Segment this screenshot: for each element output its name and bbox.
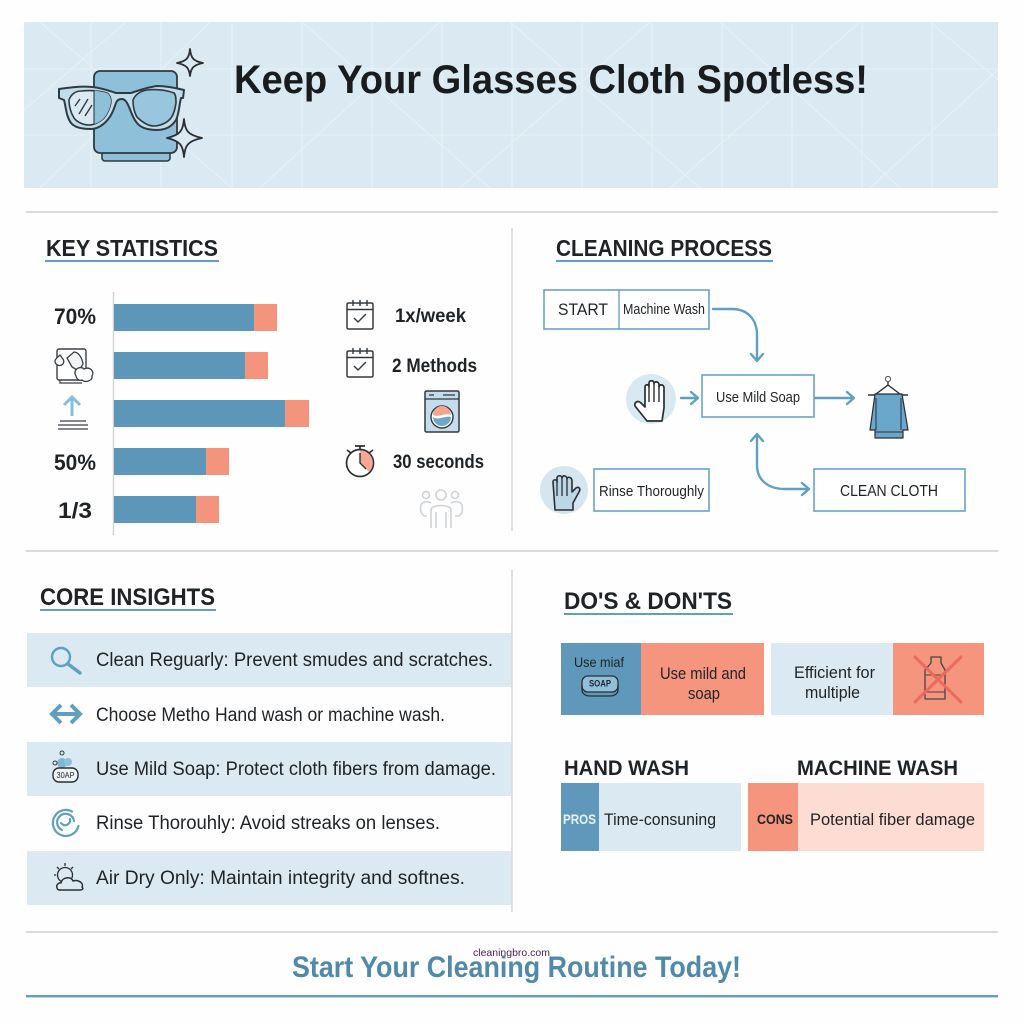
icon: small sparkle <box>177 49 203 76</box>
title: Keep Your Glasses Cloth Spotless! <box>234 58 868 102</box>
card: use mild soap do: Use miaf <box>574 654 624 670</box>
icon: glove in circle <box>540 466 588 514</box>
row: use mild soap: 30AP <box>56 771 74 780</box>
icon: calendar one <box>347 300 373 329</box>
row: rinse thoroughly: Rinse Thorouhly: Avoid streaks on lenses. <box>96 813 440 834</box>
label: machine wash: MACHINE WASH <box>797 757 958 780</box>
row: air dry only: Air Dry Only: Maintain integrity and softnes. <box>96 868 465 889</box>
row: clean regularly: Clean Reguarly: Prevent smudes and scratches. <box>96 650 493 671</box>
card: use mild soap do <box>561 643 764 715</box>
bar chart <box>114 304 309 523</box>
flow box: start and machine wash <box>544 290 709 329</box>
flow box: use mild soap <box>702 375 814 417</box>
footer call to action: Start Your Cleaning Routine Today! <box>292 951 741 984</box>
panel: key statistics <box>45 235 484 535</box>
stat: 70%: 70% <box>54 304 96 329</box>
card: efficient and no harsh chemicals <box>771 643 984 715</box>
stat: 1x/week: 1x/week <box>395 306 466 327</box>
icon: people <box>421 490 462 528</box>
card: use mild soap do: Use mild and <box>660 664 746 683</box>
flow box: use mild soap: Use Mild Soap <box>716 389 800 406</box>
icon: calendar two <box>347 348 373 377</box>
flow box: start and machine wash: Machine Wash <box>623 301 705 318</box>
icon: hand in circle <box>626 374 676 424</box>
arrow: soap and clean cloth <box>751 434 809 495</box>
card: cons <box>748 783 984 851</box>
icon: washing machine <box>425 391 459 432</box>
stat: 1/3: 1/3 <box>58 498 92 523</box>
icon: large sparkle <box>167 119 202 157</box>
heading: do's and don'ts: DO'S & DON'TS <box>564 588 732 615</box>
stat: 2 methods: 2 Methods <box>392 356 477 377</box>
card: efficient and no harsh chemicals: multiple <box>805 683 860 702</box>
row: use mild soap <box>27 742 511 796</box>
flow box: clean cloth <box>814 469 965 511</box>
card: use mild soap do: soap <box>688 684 720 703</box>
flow box: clean cloth: CLEAN CLOTH <box>840 483 938 500</box>
icon: stopwatch <box>346 446 374 476</box>
row: choose method: Choose Metho Hand wash or machine wash. <box>96 705 445 726</box>
panel: core insights <box>27 584 511 905</box>
stat: 30 seconds: 30 seconds <box>393 452 484 473</box>
card: pros <box>561 783 741 851</box>
icon: glasses and cloth <box>59 71 184 161</box>
row: air dry only <box>27 851 511 905</box>
arrow: hand to soap <box>681 392 698 404</box>
arrow: soap to drying <box>815 392 854 404</box>
card: pros: Time-consuning <box>604 810 716 829</box>
heading: core insights: CORE INSIGHTS <box>40 584 215 611</box>
arrow: machine wash to soap <box>713 309 763 361</box>
flow box: rinse thoroughly: Rinse Thoroughly <box>599 483 704 500</box>
flow box: rinse thoroughly <box>594 469 709 511</box>
row: clean regularly <box>27 633 511 687</box>
row: use mild soap: Use Mild Soap: Protect cloth fibers from damage. <box>96 759 496 780</box>
card: use mild soap do: SOAP <box>589 678 611 688</box>
icon: up arrow over stack <box>58 397 88 429</box>
card: cons: Potential fiber damage <box>810 810 975 829</box>
heading: cleaning process: CLEANING PROCESS <box>556 235 772 261</box>
heading: key statistics: KEY STATISTICS <box>46 235 218 261</box>
panel: do's and don'ts <box>561 588 984 851</box>
card: cons: CONS <box>757 811 793 827</box>
header banner <box>24 22 998 188</box>
label: hand wash: HAND WASH <box>564 757 689 780</box>
card: pros: PROS <box>563 811 596 827</box>
stat: 50%: 50% <box>54 450 96 475</box>
icon: cloth on hanger <box>868 376 908 438</box>
panel: cleaning process <box>540 235 965 514</box>
flow box: start and machine wash: START <box>558 300 608 319</box>
watermark: cleaningbro.com <box>473 947 550 959</box>
card: efficient and no harsh chemicals: Efficient for <box>794 663 875 682</box>
icon: dirty cloth <box>55 349 93 383</box>
